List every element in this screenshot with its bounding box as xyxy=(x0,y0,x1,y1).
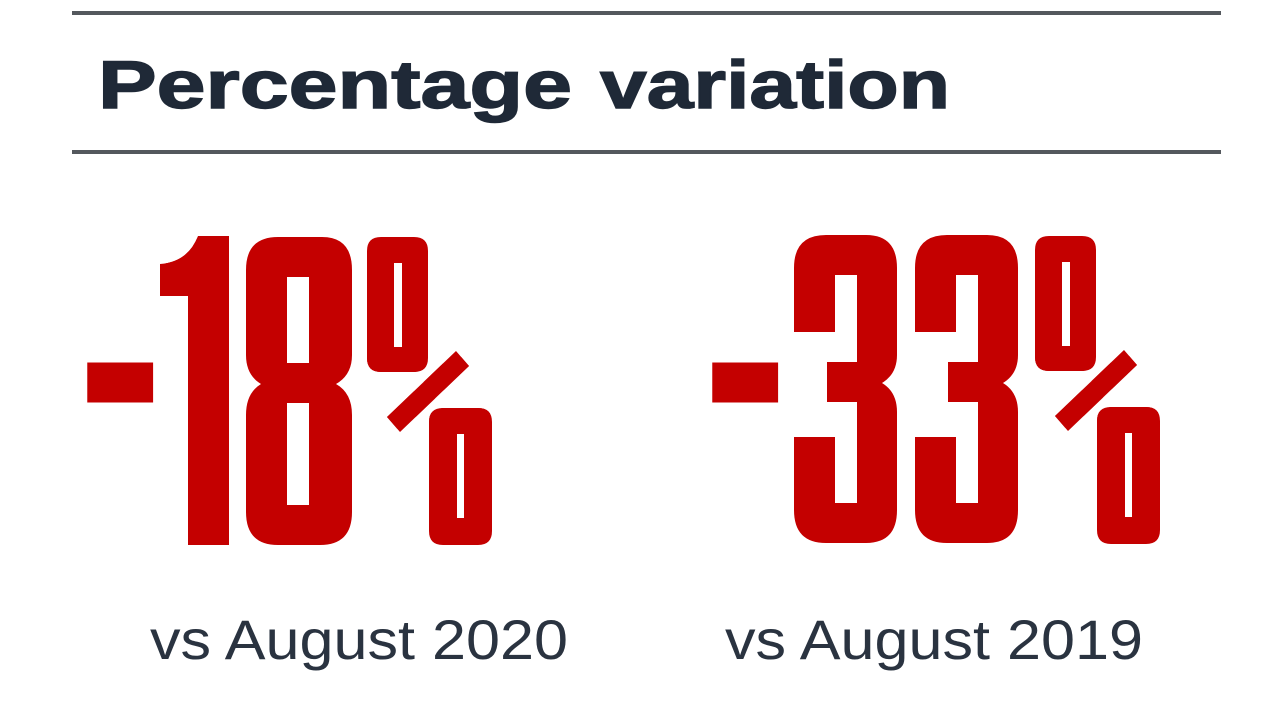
figure: -33%: 3 xyxy=(788,153,902,633)
title xyxy=(98,47,950,123)
figure: -33% xyxy=(712,235,1160,544)
figure: -18% xyxy=(87,236,492,545)
caption: vs August 2020: vs August 2020 xyxy=(150,608,568,671)
figure: -18%: % xyxy=(362,152,495,633)
figure: -33%: 3 xyxy=(909,153,1023,633)
stat: -33% vs August 2019 xyxy=(712,235,1160,670)
figure: -33%: - xyxy=(707,213,784,508)
stat: -18% vs August 2020 xyxy=(87,236,566,670)
title: variation xyxy=(600,47,950,123)
figure: -33%: % xyxy=(1030,151,1163,632)
title: Percentage xyxy=(98,47,572,123)
caption: vs August 2019: vs August 2019 xyxy=(725,608,1143,671)
figure: -18%: - xyxy=(82,213,159,508)
figure: -18%: 1 xyxy=(120,145,283,636)
figure: -18%: 8 xyxy=(237,153,351,633)
